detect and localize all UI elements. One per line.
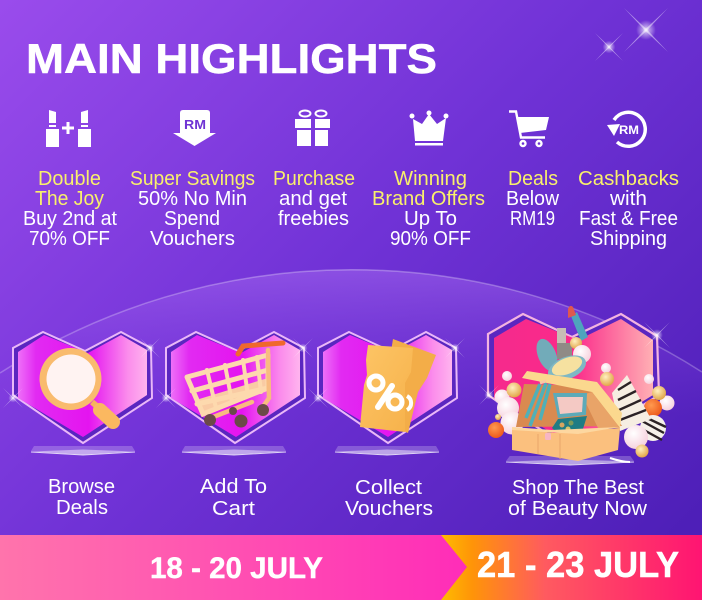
icon: vouchers: [360, 339, 436, 433]
text: Buy 2nd at: [23, 208, 117, 230]
heart: [308, 332, 465, 443]
date panel: 21-23 July: [441, 535, 702, 600]
title: MAIN HIGHLIGHTS: [26, 35, 437, 82]
box front: [512, 428, 620, 461]
nail polish: [557, 328, 566, 343]
step: collect vouchers: [308, 332, 465, 520]
text: Winning: [394, 168, 467, 190]
text: 50% No Min: [138, 188, 247, 210]
icon: gift: [295, 110, 330, 146]
cone: [612, 375, 651, 431]
icon: cashback RM: RM: [619, 123, 639, 137]
text: [130, 168, 255, 250]
step: browse deals: [3, 332, 160, 519]
text: [372, 168, 485, 250]
stand: [31, 446, 135, 455]
highlight: super savings: [130, 110, 255, 250]
text: Cashbacks: [578, 168, 679, 190]
date panel: 18-20 July: 18 - 20 JULY: [150, 552, 323, 585]
text: Brand Offers: [372, 188, 485, 210]
label: [48, 476, 115, 519]
step: shop the best of beauty: [479, 306, 674, 520]
sparkles top right: [595, 8, 668, 61]
label: [345, 477, 433, 520]
date panel: 18-20 July: [0, 535, 470, 600]
text: Up To: [404, 208, 457, 230]
highlight: deals below RM19: [506, 112, 560, 230]
text: [578, 168, 679, 250]
highlight: cashbacks: [578, 112, 679, 250]
spheres: [488, 363, 674, 458]
text: The Joy: [35, 188, 104, 210]
text: [23, 168, 117, 250]
stand: [182, 446, 286, 455]
label: of Beauty Now: [508, 498, 648, 520]
text: Spend: [164, 208, 220, 230]
text: [506, 168, 560, 230]
palette: [552, 416, 587, 432]
icon: RM down arrow: RM: [184, 118, 206, 132]
label: Shop The Best: [512, 477, 644, 499]
icon: shopping cart: [187, 343, 283, 428]
label: Add To: [200, 476, 267, 498]
heart: [479, 314, 670, 450]
text: 90% OFF: [390, 228, 471, 250]
heart: [3, 332, 160, 443]
text: Vouchers: [150, 228, 235, 250]
label: Deals: [56, 497, 108, 519]
text: Purchase: [273, 168, 355, 190]
dome arc: [0, 270, 702, 535]
icon: magnifier: [40, 348, 113, 422]
text: Super Savings: [130, 168, 255, 190]
box interior and lid: [516, 384, 622, 427]
date panel: 21-23 July: 21 - 23 JULY: [477, 544, 679, 585]
footer banner: [0, 535, 702, 600]
text: Deals: [508, 168, 558, 190]
label: Collect: [355, 477, 422, 499]
icon: beauty box: [488, 306, 674, 461]
icon: cart: [509, 112, 549, 146]
text: with: [609, 188, 647, 210]
label: Vouchers: [345, 498, 433, 520]
compact: [532, 336, 562, 374]
text: Below: [506, 188, 560, 210]
text: and get: [279, 188, 347, 210]
highlight: winning brand offers: [372, 110, 485, 250]
highlight: double the joy: [23, 110, 117, 250]
text: Fast & Free: [579, 208, 678, 230]
icon: lipsticks: [46, 110, 91, 147]
text: [273, 168, 355, 230]
text: 70% OFF: [29, 228, 110, 250]
icon: crown: [410, 110, 448, 146]
stand: [506, 456, 634, 465]
label: [508, 477, 648, 520]
text: freebies: [278, 208, 349, 230]
heart: [156, 332, 313, 443]
text: RM19: [510, 208, 555, 230]
label: Browse: [48, 476, 115, 498]
text: Double: [38, 168, 101, 190]
step: add to cart: [156, 332, 313, 520]
lipstick: [571, 312, 588, 341]
text: Shipping: [590, 228, 667, 250]
palette mirror: [553, 393, 587, 418]
highlight: purchase: [273, 110, 355, 230]
label: Cart: [212, 498, 255, 520]
stand: [335, 446, 439, 455]
label: [200, 476, 267, 520]
brushes: [526, 383, 550, 426]
